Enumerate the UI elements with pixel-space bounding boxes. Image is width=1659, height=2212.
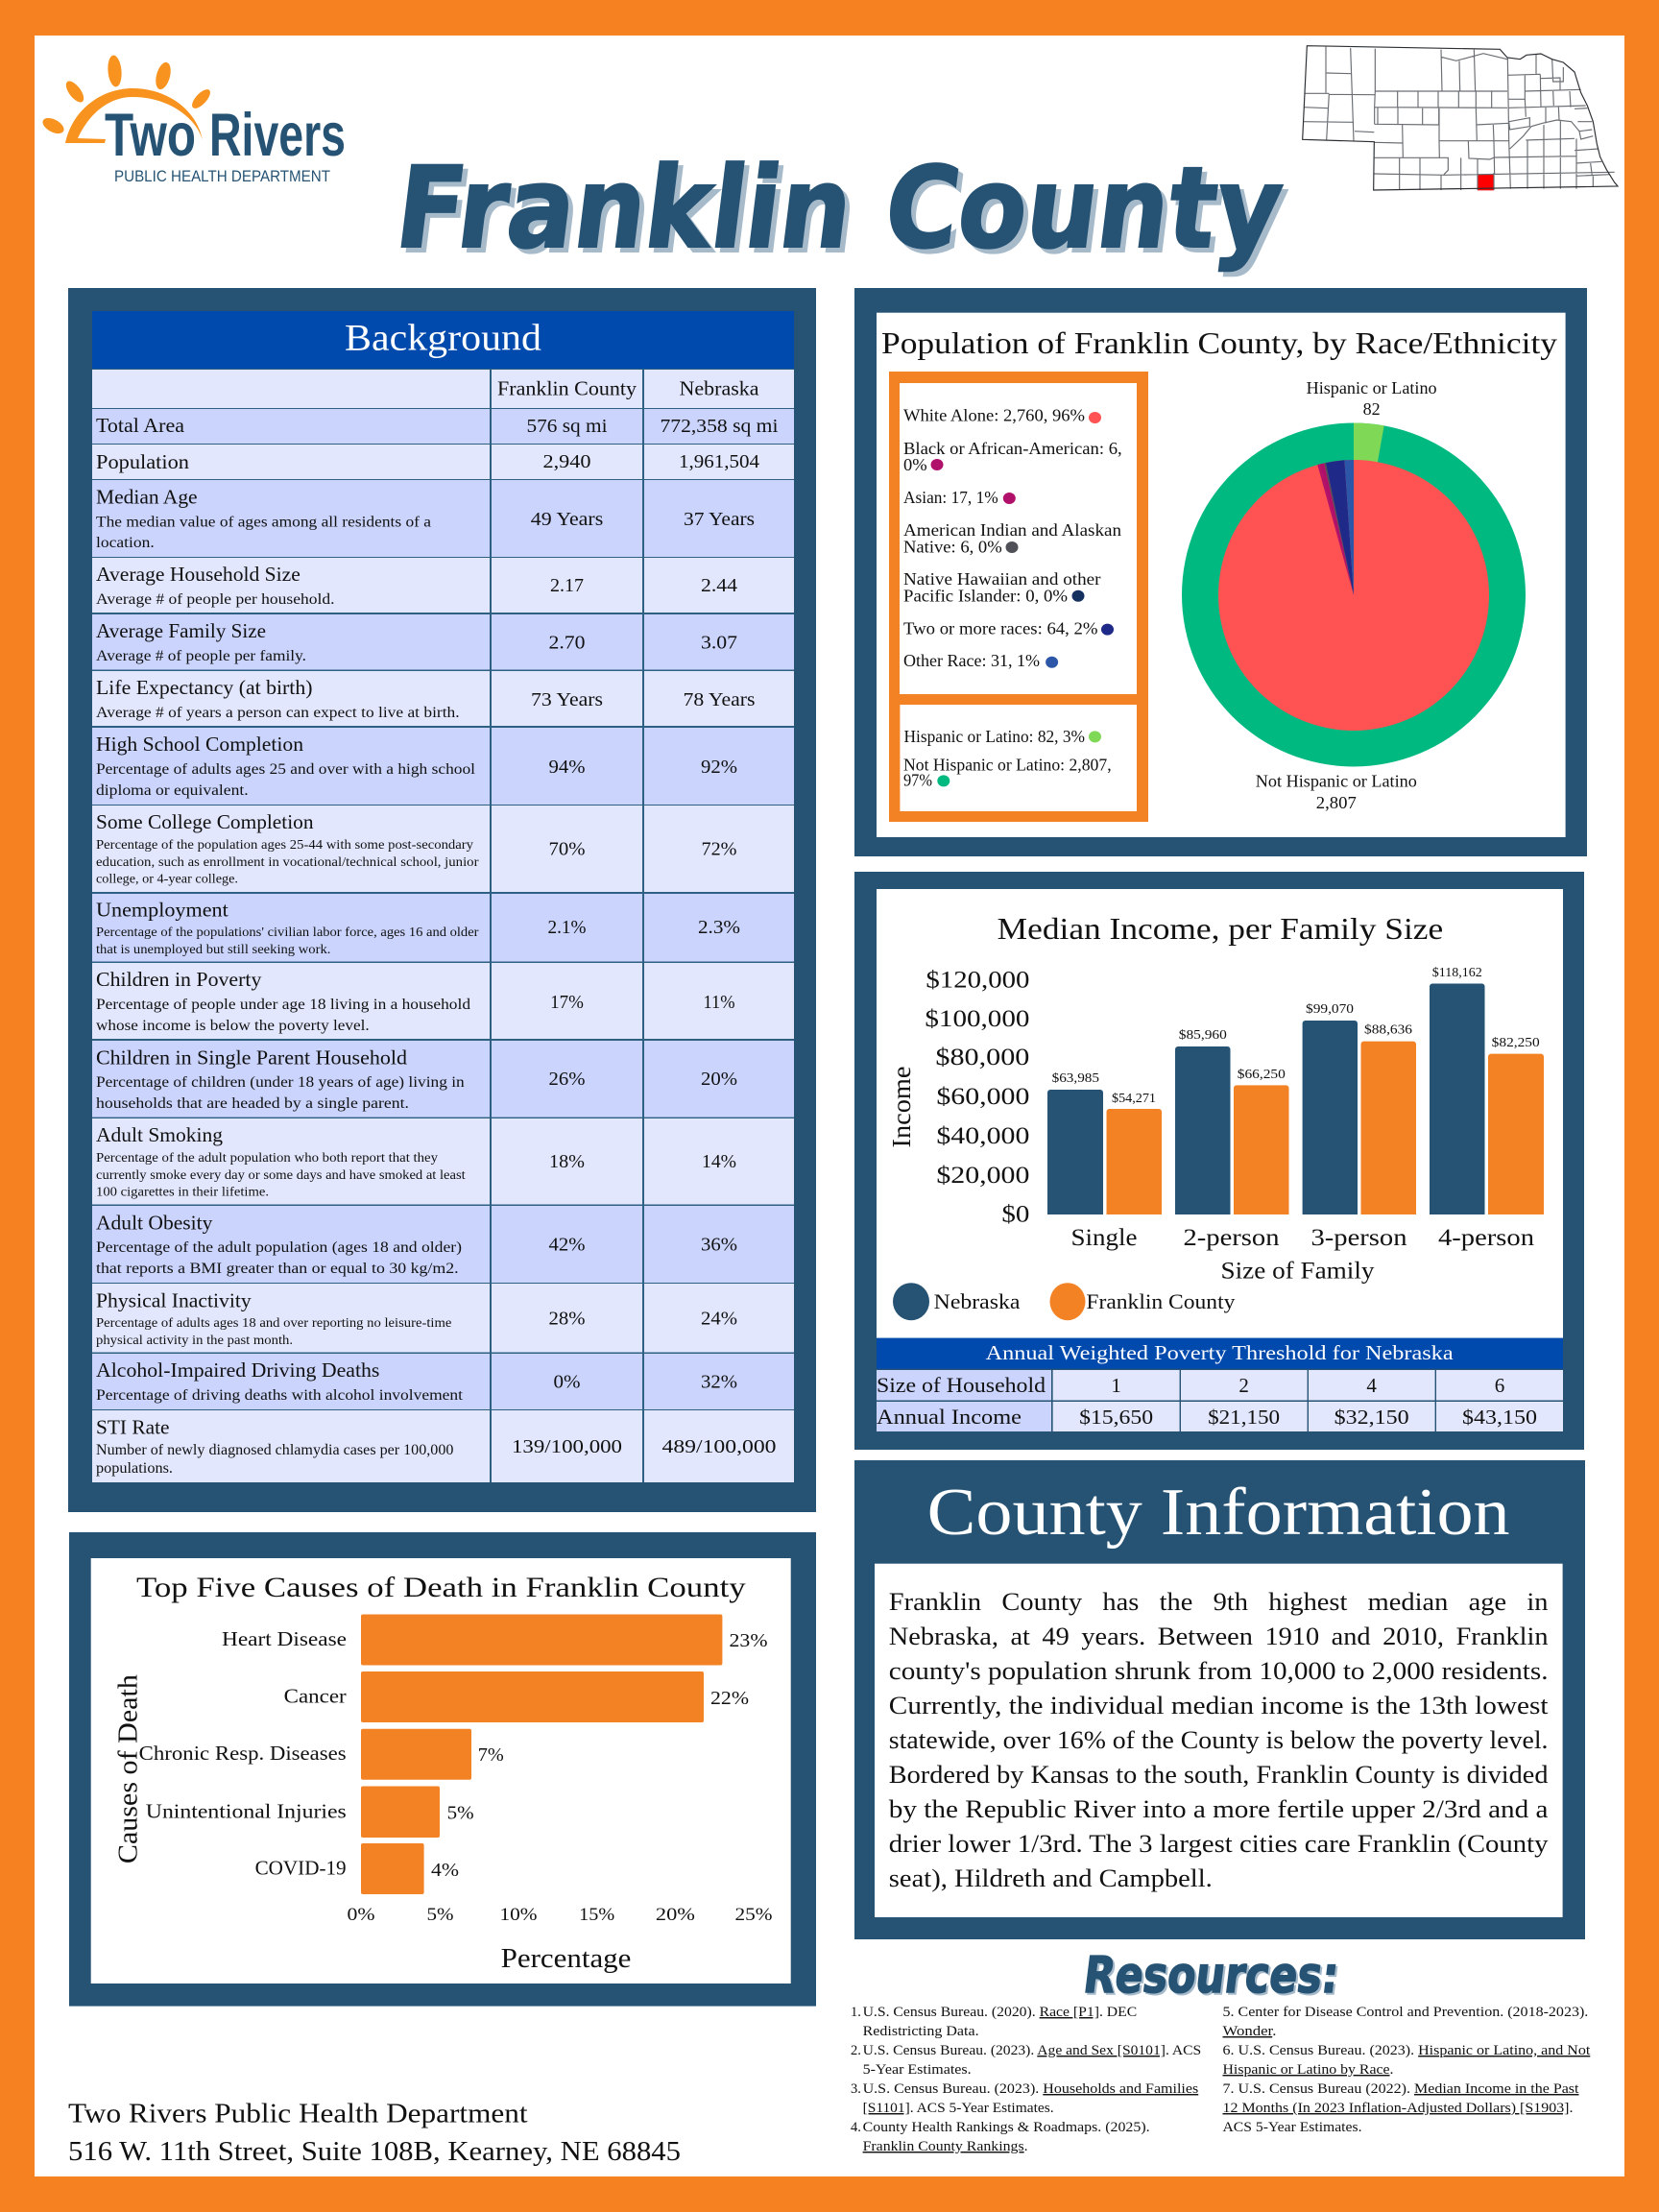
references: left column: 4. [851,2120,861,2135]
references: left column: County Health Rankings & Roadmaps. (2025). [863,2120,1150,2135]
row: High School Completion: diploma or equivalent. [96,782,249,799]
row: Population: 1,961,504 [679,452,759,472]
row: Median Age: The median value of ages among all residents of a [96,515,431,530]
y axis title: Causes of Death [114,1674,144,1863]
heading: Resources: Resources: [1080,1947,1342,2005]
bar chart: causes of death: 5% [426,1905,454,1925]
row: Average Family Size: 3.07 [701,634,737,653]
y axis labels: $100,000 [925,1006,1029,1032]
row: Unemployment: that is unemployed but still seeking work. [96,942,330,956]
bar chart: causes of death: 10% [499,1905,538,1925]
row: Adult Smoking: Adult Smoking [96,1123,224,1146]
body text: Currently, the individual median income is the 13th lowest [889,1692,1549,1719]
row: Some College Completion [92,805,794,892]
legend: Native Hawaiian and other [903,569,1101,589]
row: High School Completion: 94% [549,757,586,778]
row: Median Age [92,480,794,557]
references: left column: Franklin County Rankings . [863,2139,1028,2154]
row: Population: Population [96,450,190,473]
row: Adult Obesity [92,1206,794,1283]
table column headers: Franklin County [497,376,637,399]
bar chart: median income [1047,965,1544,1251]
row: Some College Completion: Some College Completion [96,810,314,833]
pie label: Hispanic or Latino: Hispanic or Latino [1307,378,1437,397]
bar chart: median income: $99,070 [1306,1001,1354,1016]
row: Children in Single Parent Household: 20% [701,1070,737,1090]
pie label: Not Hispanic or Latino: Not Hispanic or Latino [1256,772,1417,791]
row: High School Completion: High School Completion [96,733,304,756]
body text: county's population shrunk from 10,000 to 2,000 residents. [889,1657,1548,1685]
y axis labels [925,968,1029,1228]
row: Children in Single Parent Household: Percentage of children (under 18 years of age) living in [96,1074,465,1091]
references: right column: 6. U.S. Census Bureau. (2023). Hispanic or Latino, and Not [1223,2043,1590,2058]
legend: 97% [903,770,932,789]
bar chart: causes of death [139,1615,773,1925]
bar chart: median income: $85,960 [1179,1027,1227,1042]
bar chart: median income: 3-person [1311,1225,1407,1251]
legend [889,372,1148,822]
row: Life Expectancy: 78 Years [684,690,755,710]
bar chart: causes of death: 23% [730,1630,768,1651]
bar chart: causes of death: 22% [710,1688,749,1709]
table: Annual Weighted Poverty Threshold: 6 [1495,1374,1504,1397]
y axis labels: $60,000 [936,1084,1029,1110]
row: Adult Smoking: currently smoke every day or some days and have smoked at least [96,1167,466,1182]
legend: Native: 6, 0% [903,538,1002,557]
row: Some College Completion: 72% [701,840,737,860]
references: left column: 1. [851,2005,861,2020]
references: right column: 7. U.S. Census Bureau (2022). Median Income in the Past [1223,2081,1578,2097]
bar chart: median income: $82,250 [1492,1035,1540,1049]
bar chart: median income: $54,271 [1112,1091,1156,1105]
row: Median Age: 49 Years [531,510,603,530]
row: STI Rate: Number of newly diagnosed chlamydia cases per 100,000 [96,1442,454,1458]
pie chart: race and ethnicity [1182,422,1526,766]
row: Adult Obesity: Percentage of the adult population (ages 18 and older) [96,1239,462,1256]
references: left column: 3. [851,2081,861,2097]
body text: Bordered by Kansas to the south, Franklin County is divided [889,1761,1548,1789]
row: Average Household Size: 2.44 [701,576,737,596]
row: Median Age: 37 Years [684,510,755,530]
row: STI Rate [92,1410,794,1482]
row: Unemployment [92,894,794,962]
panel: Background table [68,288,816,1512]
references: left column: 2. [851,2043,861,2058]
body text: Nebraska, at 49 years. Between 1910 and 2010, Franklin [889,1623,1548,1650]
row: Physical Inactivity: physical activity in the past month. [96,1333,293,1347]
legend: Nebraska and Franklin County: Nebraska [934,1289,1021,1313]
bar chart: causes of death: Chronic Resp. Diseases [139,1742,347,1765]
row: Unemployment: 2.1% [547,918,586,938]
chart title: Median Income, per Family Size [998,911,1443,946]
table: Annual Weighted Poverty Threshold: 2 [1238,1374,1249,1397]
row: Alcohol-Impaired Driving Deaths [92,1354,794,1409]
row: Alcohol-Impaired Driving Deaths: 32% [701,1373,737,1393]
x axis title: Size of Family [1221,1259,1375,1285]
row: Children in Single Parent Household: households that are headed by a single parent. [96,1095,409,1112]
row: Some College Completion: college, or 4-year college. [96,872,238,886]
chart title: Top Five Causes of Death in Franklin County [136,1572,746,1603]
table: Annual Weighted Poverty Threshold: Size of Household [877,1373,1046,1397]
logo: Two Rivers Public Health Department [40,55,346,185]
row: Average Household Size: Average Household Size [96,563,301,586]
chart title: Population of Franklin County, by Race/Ethnicity [881,325,1557,360]
title: Franklin County: Franklin County [395,147,1294,278]
table: Annual Weighted Poverty Threshold: $32,150 [1334,1406,1409,1429]
legend: Nebraska and Franklin County [893,1283,1235,1320]
references: right column: 12 Months (In 2023 Inflation-Adjusted Dollars) [S1903] . [1223,2101,1573,2116]
bar chart: causes of death: 25% [735,1905,773,1925]
bar chart: median income: Single [1071,1225,1137,1251]
pie label: Hispanic or Latino [1307,378,1437,419]
row: Average Household Size: 2.17 [550,576,584,596]
contact address: Two Rivers Public Health Department [68,2099,528,2129]
bar chart: median income: $66,250 [1238,1067,1286,1081]
bar chart: causes of death: 20% [656,1905,695,1925]
row: Total Area: 576 sq mi [526,417,608,437]
row: Physical Inactivity [92,1284,794,1352]
references: left column: [S1101]. ACS 5-Year Estimates. [863,2101,1054,2116]
row: Adult Obesity: Adult Obesity [96,1212,213,1235]
row: Children in Poverty: 17% [550,993,584,1013]
table column headers [92,370,794,408]
map: Nebraska counties with Franklin County highlighted [1303,46,1618,190]
legend: Pacific Islander: 0, 0% [903,586,1068,605]
body text: Franklin County has the 9th highest median age in [889,1588,1548,1616]
row: Children in Poverty: whose income is below the poverty level. [96,1018,370,1034]
row: STI Rate: populations. [96,1460,173,1477]
bar chart: causes of death: Unintentional Injuries [146,1800,347,1823]
references: left column: U.S. Census Bureau. (2020). Race [P1] . DEC [863,2005,1137,2020]
table: Annual Weighted Poverty Threshold: 1 [1111,1374,1121,1397]
row: STI Rate: 489/100,000 [662,1437,776,1457]
body text: drier lower 1/3rd. The 3 largest cities care Franklin (County [889,1830,1548,1858]
references: right column: 5. Center for Disease Control and Prevention. (2018-2023). [1223,2005,1588,2020]
row: Adult Smoking: 18% [549,1152,585,1172]
row: Median Age: Median Age [96,486,198,509]
references: left column [851,2005,1201,2154]
y axis labels: $80,000 [935,1045,1029,1070]
table: Annual Weighted Poverty Threshold [877,1338,1563,1431]
row: Physical Inactivity: 24% [701,1310,737,1329]
legend: Hispanic or Latino: 82, 3% [904,727,1085,746]
row: Median Age: location. [96,535,155,551]
row: Unemployment: Unemployment [96,898,228,921]
row: Life Expectancy [92,671,794,726]
references: left column: U.S. Census Bureau. (2023). Age and Sex [S0101] . ACS [863,2043,1201,2058]
legend: Not Hispanic or Latino: 2,807, [903,756,1112,775]
table: Annual Weighted Poverty Threshold: $21,150 [1208,1406,1280,1429]
heading: Resources: Resources: [1082,1949,1344,2007]
row: Alcohol-Impaired Driving Deaths: Percentage of driving deaths with alcohol involvement [96,1387,464,1404]
row: Total Area: Total Area [96,414,185,437]
table: Annual Weighted Poverty Threshold: 4 [1366,1374,1377,1397]
legend: Black or African-American: 6, [903,439,1122,458]
references: left column: U.S. Census Bureau. (2023). Households and Families [863,2081,1199,2097]
body text: seat), Hildreth and Campbell. [889,1864,1213,1892]
row: Adult Smoking [92,1118,794,1204]
legend: Asian: 17, 1% [903,488,998,507]
row: Alcohol-Impaired Driving Deaths: 0% [553,1373,580,1393]
logo: Two Rivers Public Health Department: Two [105,102,196,169]
row: Adult Smoking: Percentage of the adult population who both report that they [96,1150,438,1165]
legend: Other Race: 31, 1% [903,651,1040,670]
table: Annual Weighted Poverty Threshold: Annual Income [877,1405,1022,1429]
contact address: 516 W. 11th Street, Suite 108B, Kearney, NE 68845 [68,2137,681,2167]
y axis labels: $40,000 [936,1123,1029,1149]
heading: Background: Background [345,317,542,359]
legend: Nebraska and Franklin County: Franklin County [1086,1289,1235,1313]
row: Population [92,445,794,479]
bar chart: causes of death: 15% [579,1905,614,1925]
row: STI Rate: 139/100,000 [512,1437,622,1457]
heading: County Information: County Information [927,1476,1510,1550]
row: Physical Inactivity: 28% [549,1310,586,1329]
row: Unemployment: Percentage of the populations' civilian labor force, ages 16 and older [96,925,479,939]
row: Average Household Size [92,558,794,613]
row: Children in Poverty: Children in Poverty [96,968,262,991]
bar chart: median income: $88,636 [1364,1022,1412,1037]
pie label: Not Hispanic or Latino [1256,772,1417,812]
row: Average Family Size [92,614,794,670]
bar chart: median income: $63,985 [1052,1070,1099,1085]
panel: Median Income per Family Size [854,872,1584,1450]
table column headers: Nebraska [680,376,759,399]
row: Some College Completion: Percentage of the population ages 25-44 with some post-secondary [96,837,473,852]
contact address [68,2099,681,2167]
table: Annual Weighted Poverty Threshold: $15,650 [1079,1406,1153,1429]
row: Children in Single Parent Household: 26% [549,1070,586,1090]
row: Average Family Size: 2.70 [549,634,586,653]
row: Life Expectancy: Life Expectancy (at birth) [96,676,313,699]
row: STI Rate: STI Rate [96,1416,169,1439]
logo: Two Rivers Public Health Department: Rivers [209,102,346,169]
bar chart: median income: 4-person [1438,1225,1535,1251]
row: Adult Smoking: 100 cigarettes in their lifetime. [96,1185,269,1199]
legend: American Indian and Alaskan [903,520,1121,540]
heading: Background [92,311,794,369]
row: Physical Inactivity: Percentage of adults ages 18 and over reporting no leisure-time [96,1315,451,1330]
row: Average Family Size: Average # of people per family. [96,648,306,664]
legend: White Alone: 2,760, 96% [903,406,1085,425]
row: Adult Obesity: 36% [701,1235,737,1256]
row: Some College Completion: 70% [549,840,586,860]
row: High School Completion [92,728,794,805]
bar chart: median income: $118,162 [1432,965,1482,979]
references: right column: ACS 5-Year Estimates. [1223,2120,1361,2135]
row: Some College Completion: education, such as enrollment in vocational/technical school, junior [96,854,479,869]
row: Adult Obesity: that reports a BMI greater than or equal to 30 kg/m2. [96,1261,459,1277]
row: Unemployment: 2.3% [698,918,740,938]
bar chart: median income: 2-person [1183,1225,1280,1251]
panel: Population by Race/Ethnicity [854,288,1587,856]
row: Children in Poverty: 11% [703,993,735,1013]
row: Population: 2,940 [543,452,591,472]
bar chart: causes of death: 7% [478,1744,504,1766]
row: Children in Poverty [92,963,794,1039]
table: Annual Weighted Poverty Threshold: $43,150 [1462,1406,1537,1429]
pie label: Hispanic or Latino: 82 [1363,399,1381,419]
row: Adult Obesity: 42% [549,1235,586,1256]
row: Total Area: 772,358 sq mi [661,417,779,437]
row: Children in Poverty: Percentage of people under age 18 living in a household [96,997,470,1013]
bar chart: causes of death: 4% [431,1860,459,1881]
y axis labels: $20,000 [936,1163,1029,1189]
row: Alcohol-Impaired Driving Deaths: Alcohol-Impaired Driving Deaths [96,1358,379,1382]
references: right column: Hispanic or Latino by Race . [1223,2062,1394,2078]
references: left column: Redistricting Data. [863,2024,979,2039]
x axis title: Percentage [501,1944,631,1974]
row: Adult Smoking: 14% [702,1152,736,1172]
references: left column: 5-Year Estimates. [863,2062,972,2078]
references: right column [1223,2005,1590,2135]
body text: statewide, over 16% of the County is below the poverty level. [889,1726,1548,1754]
row: Children in Single Parent Household [92,1041,794,1118]
title: Franklin County: Franklin County [390,142,1289,274]
bar chart: causes of death: Heart Disease [222,1627,347,1650]
body text: by the Republic River into a more fertile upper 2/3rd and a [889,1795,1549,1823]
bar chart: causes of death: COVID-19 [255,1857,347,1880]
row: Average Family Size: Average Family Size [96,619,266,642]
pie label: Not Hispanic or Latino: 2,807 [1316,793,1357,812]
row: Physical Inactivity: Physical Inactivity [96,1288,252,1311]
legend: 0% [903,455,927,474]
panel: Top Five Causes of Death [69,1532,816,2007]
row: Average Household Size: Average # of people per household. [96,591,334,608]
bar chart: causes of death: Cancer [284,1684,347,1707]
row: Life Expectancy: 73 Years [531,690,603,710]
references: right column: Wonder . [1223,2024,1276,2039]
row: Total Area [92,409,794,444]
row: High School Completion: Percentage of adults ages 25 and over with a high school [96,761,475,778]
legend: Two or more races: 64, 2% [903,618,1098,637]
panel: County Information [854,1460,1585,1939]
row: High School Completion: 92% [701,757,737,778]
body text [889,1588,1549,1892]
row: Children in Single Parent Household: Children in Single Parent Household [96,1046,408,1070]
table: Annual Weighted Poverty Threshold: Annual Weighted Poverty Threshold for Nebraska [986,1341,1454,1364]
y axis labels: $120,000 [926,968,1029,993]
bar chart: causes of death: 5% [447,1803,474,1824]
bar chart: causes of death: 0% [348,1905,375,1925]
y axis title: Income [887,1066,916,1148]
row: Life Expectancy: Average # of years a person can expect to live at birth. [96,705,460,721]
y axis labels: $0 [1001,1202,1029,1228]
logo: Two Rivers Public Health Department: PUBLIC HEALTH DEPARTMENT [114,168,330,185]
